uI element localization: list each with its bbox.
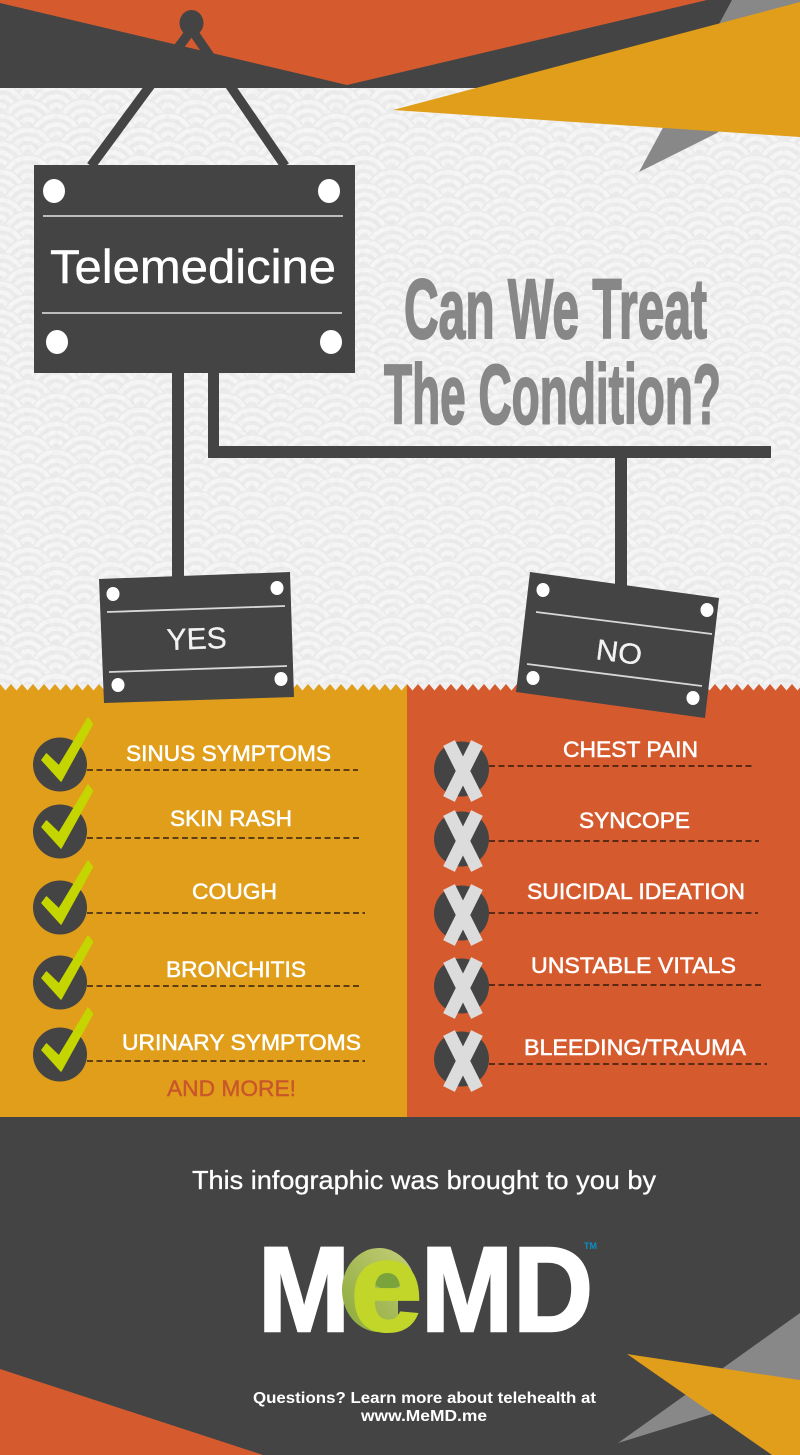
item: bronchitis [33,936,362,1010]
main sign: Telemedicine: Telemedicine [50,240,336,293]
main sign: Telemedicine [34,165,355,373]
item: unstable vitals [434,953,762,1016]
credit line: This infographic was brought to you by [192,1165,656,1195]
torn paper edge [0,684,800,691]
footer corner: gray [618,1313,800,1443]
item: suicidal ideation: SUICIDAL IDEATION [527,879,745,904]
item: urinary symptoms: URINARY SYMPTOMS [122,1030,361,1055]
item: bleeding/trauma [434,1032,767,1089]
item: chest pain [434,737,755,799]
item: cough: COUGH [192,879,277,904]
item: suicidal ideation [434,879,758,943]
and more note: AND MORE! [167,1076,296,1101]
item: sinus symptoms [33,718,358,792]
connector poles [172,373,771,588]
item: skin rash: SKIN RASH [170,806,292,831]
list: no items [434,737,767,1089]
sign: NO: NO [594,634,644,672]
item: chest pain: CHEST PAIN [563,737,698,762]
item: cough [33,861,365,934]
item: bronchitis: BRONCHITIS [166,957,306,982]
hanging ropes and nail [91,10,285,166]
footer call to action: Questions? Learn more about telehealth at [253,1390,597,1407]
item: urinary symptoms [33,1008,365,1082]
logo: MeMD: MD [421,1221,593,1357]
logo: MeMD: e [350,1213,423,1359]
footer call to action [253,1390,597,1425]
top banner shapes [0,0,800,172]
logo: MeMD: TM [584,1241,597,1251]
panel: no conditions [407,684,800,1117]
sign: YES: YES [166,622,227,657]
footer corner: orange [0,1369,263,1455]
logo: MeMD [258,1213,597,1359]
list: yes items [33,718,365,1101]
item: syncope: SYNCOPE [579,808,690,833]
logo: MeMD: M [258,1221,350,1357]
item: unstable vitals: UNSTABLE VITALS [531,953,736,978]
item: syncope [434,808,759,869]
panel: footer [0,1117,800,1455]
panel: yes conditions [0,684,407,1117]
item: sinus symptoms: SINUS SYMPTOMS [126,741,331,766]
item: skin rash [33,785,362,858]
footer corner: gold [627,1354,800,1455]
heading [384,262,721,442]
sign: NO [516,572,719,718]
patterned paper background [0,0,800,690]
footer call to action: www.MeMD.me [360,1408,487,1425]
sign: YES [99,572,294,703]
item: bleeding/trauma: BLEEDING/TRAUMA [524,1035,746,1060]
